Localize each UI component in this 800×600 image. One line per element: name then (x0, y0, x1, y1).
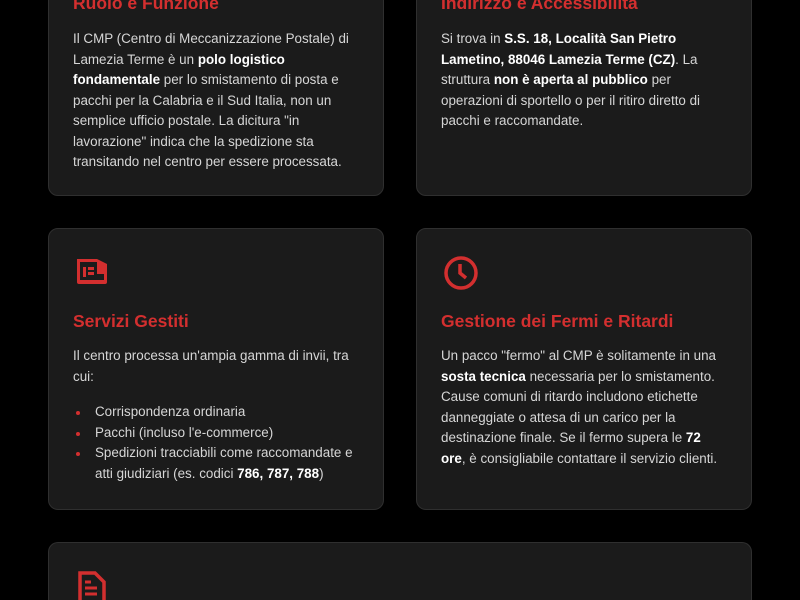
icon: document (78, 571, 106, 600)
icon: clock (444, 256, 478, 290)
text: indirizzo (441, 31, 700, 128)
panel: ruolo e funzione (48, 0, 384, 196)
text: fermi: danneggiate o attesa di un carico per la (441, 410, 676, 424)
text: fermi: Un pacco "fermo" al CMP è solitamente in una (441, 348, 716, 363)
text: ruolo: fondamentale per lo smistamento di posta e (73, 72, 339, 87)
text: indirizzo: operazioni di sportello o per il ritiro diretto di (441, 92, 700, 108)
text: ruolo: pacchi per la Calabria e il Sud Italia, non un (73, 92, 331, 108)
panel: indirizzo (416, 0, 752, 196)
icon: mail box (77, 259, 107, 284)
text: ruolo: semplice ufficio postale. La dicitura "in (73, 113, 299, 128)
text: fermi: ore, è consigliabile contattare il servizio clienti. (441, 450, 717, 466)
panel: bottom card (48, 542, 752, 600)
text: indirizzo: struttura non è aperta al pubblico per (441, 72, 671, 87)
text: indirizzo: pacchi e raccomandate. (441, 113, 583, 128)
text: servizi: cui: (73, 368, 94, 384)
heading: fermi: Gestione dei Fermi e Ritardi (441, 311, 673, 331)
text: fermi (441, 348, 717, 466)
text: servizi: atti giudiziari (es. codici 786, 787, 788) (95, 466, 324, 480)
text: fermi: destinazione finale. Se il fermo supera le 72 (441, 430, 701, 445)
text: servizi (73, 348, 353, 481)
text: servizi: Spedizioni tracciabili come raccomandate e (95, 445, 353, 460)
text: ruolo (73, 31, 349, 169)
text: servizi: Pacchi (incluso l'e-commerce) (95, 424, 273, 440)
heading: servizi: Servizi Gestiti (73, 311, 189, 331)
panel: fermi e ritardi (416, 228, 752, 510)
text: indirizzo: Si trova in S.S. 18, Località San Pietro (441, 31, 676, 46)
text: ruolo: Il CMP (Centro di Meccanizzazione Postale) di (73, 31, 349, 46)
text: ruolo: Lamezia Terme è un polo logistico (73, 52, 285, 66)
text: fermi: sosta tecnica necessaria per lo smistamento. (441, 368, 715, 384)
text: fermi: Cause comuni di ritardo includono etichette (441, 389, 698, 404)
text: servizi: Il centro processa un'ampia gamma di invii, tra (73, 348, 349, 363)
panel: servizi gestiti (48, 228, 384, 510)
text: indirizzo: Lametino, 88046 Lamezia Terme (CZ). La (441, 52, 698, 66)
text: servizi: Corrispondenza ordinaria (95, 404, 245, 419)
text: ruolo: transitando nel centro per essere processata. (73, 154, 342, 169)
text: ruolo: lavorazione" indica che la spedizione sta (73, 134, 314, 148)
